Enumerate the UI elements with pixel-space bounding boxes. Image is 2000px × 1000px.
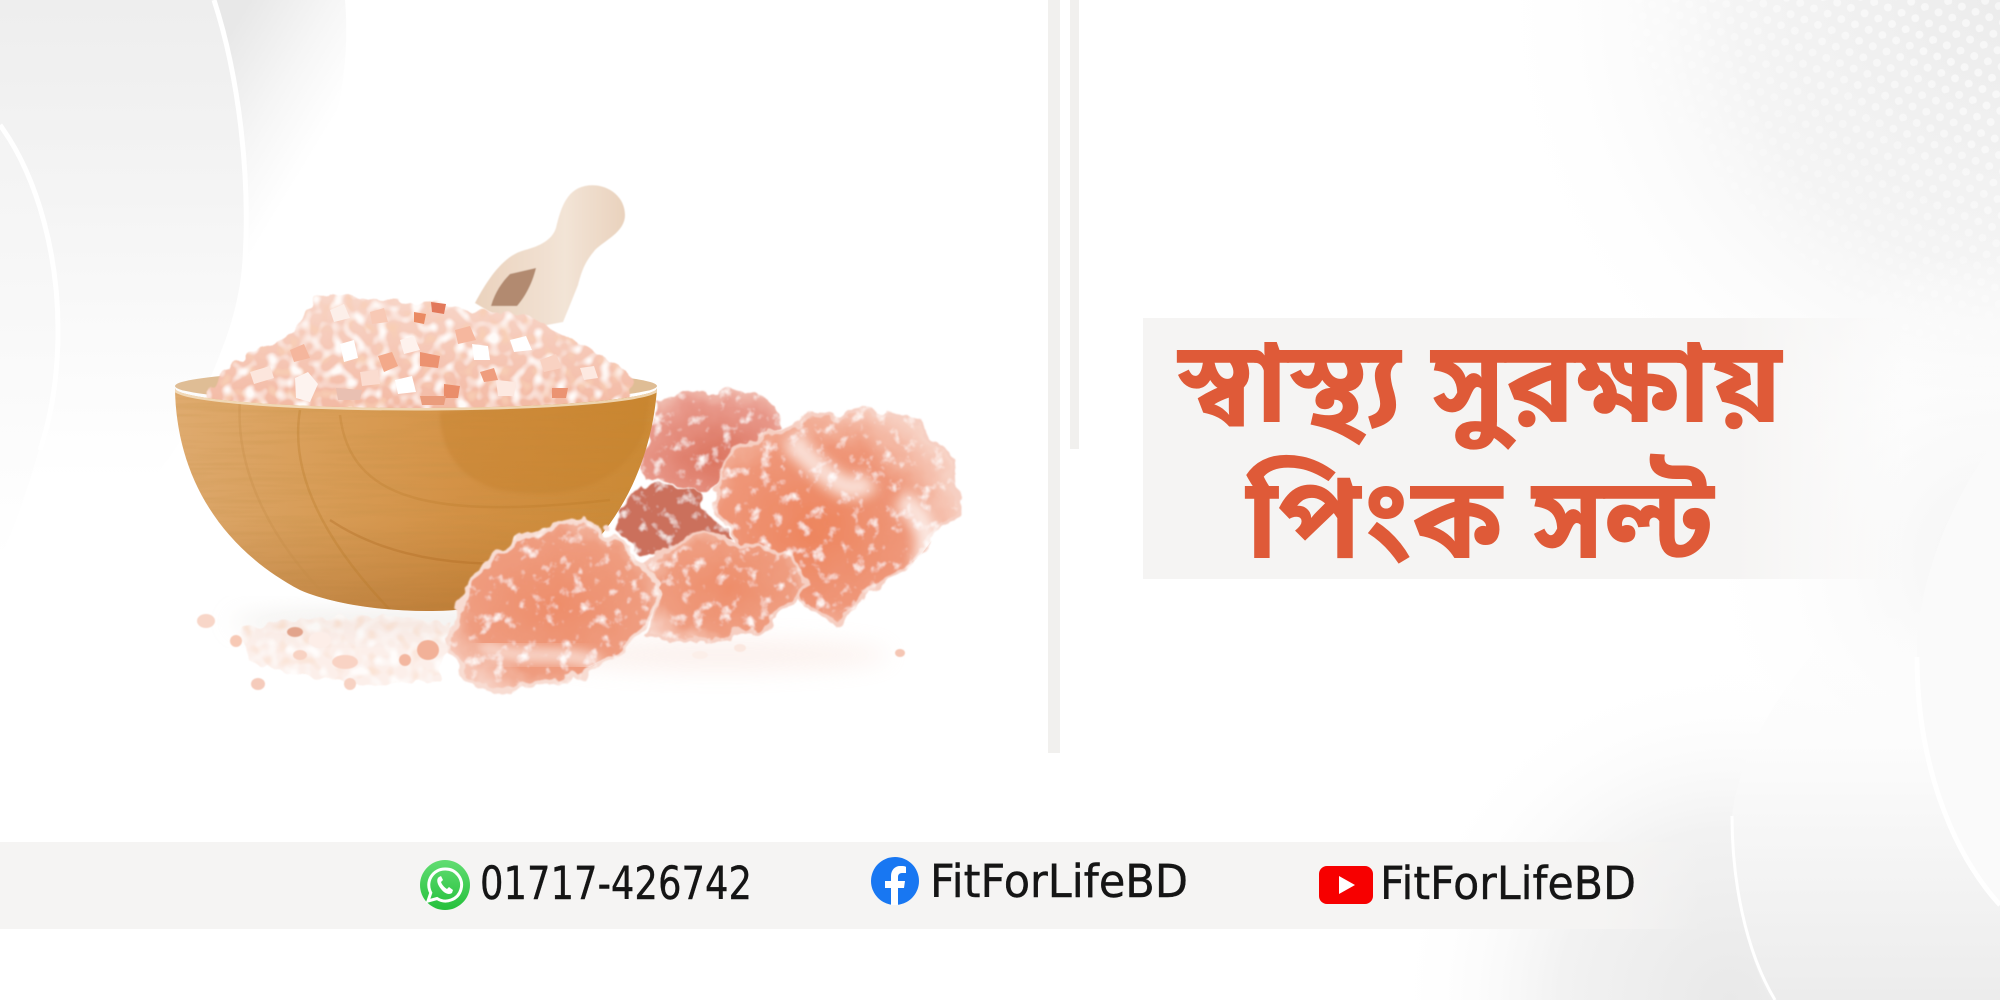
scattered salt grains	[197, 614, 905, 690]
contact bar	[0, 842, 1700, 929]
bowl back rim	[175, 369, 657, 403]
floor shadows	[230, 612, 890, 671]
icon: youtube	[1319, 866, 1373, 904]
photo: pink salt in wooden bowl with rocks	[170, 185, 955, 690]
rock: front middle	[645, 533, 807, 642]
rock: back dark	[613, 483, 728, 559]
title panel	[1143, 317, 1903, 605]
icon: whatsapp	[420, 860, 470, 910]
background: grey curved shapes and halftone dots right	[1524, 0, 2000, 1000]
background: grey curved shapes top left	[0, 0, 346, 610]
rock: front left	[448, 519, 665, 690]
wooden bowl	[175, 388, 657, 611]
icon: facebook	[871, 857, 919, 905]
title text line 1: স্বাস্থ্য সুরক্ষায়	[1176, 317, 1784, 469]
whatsapp number: 01717-426742	[480, 857, 752, 910]
rock: big right	[711, 406, 955, 625]
salt heap	[207, 292, 632, 410]
salt grains in heap	[250, 302, 598, 405]
wooden scoop	[475, 185, 625, 330]
rock: back top	[640, 387, 788, 494]
youtube handle: FitForLifeBD	[1380, 857, 1636, 910]
facebook handle: FitForLifeBD	[930, 855, 1188, 908]
title text line 2: পিংক সল্ট	[1244, 453, 1716, 605]
